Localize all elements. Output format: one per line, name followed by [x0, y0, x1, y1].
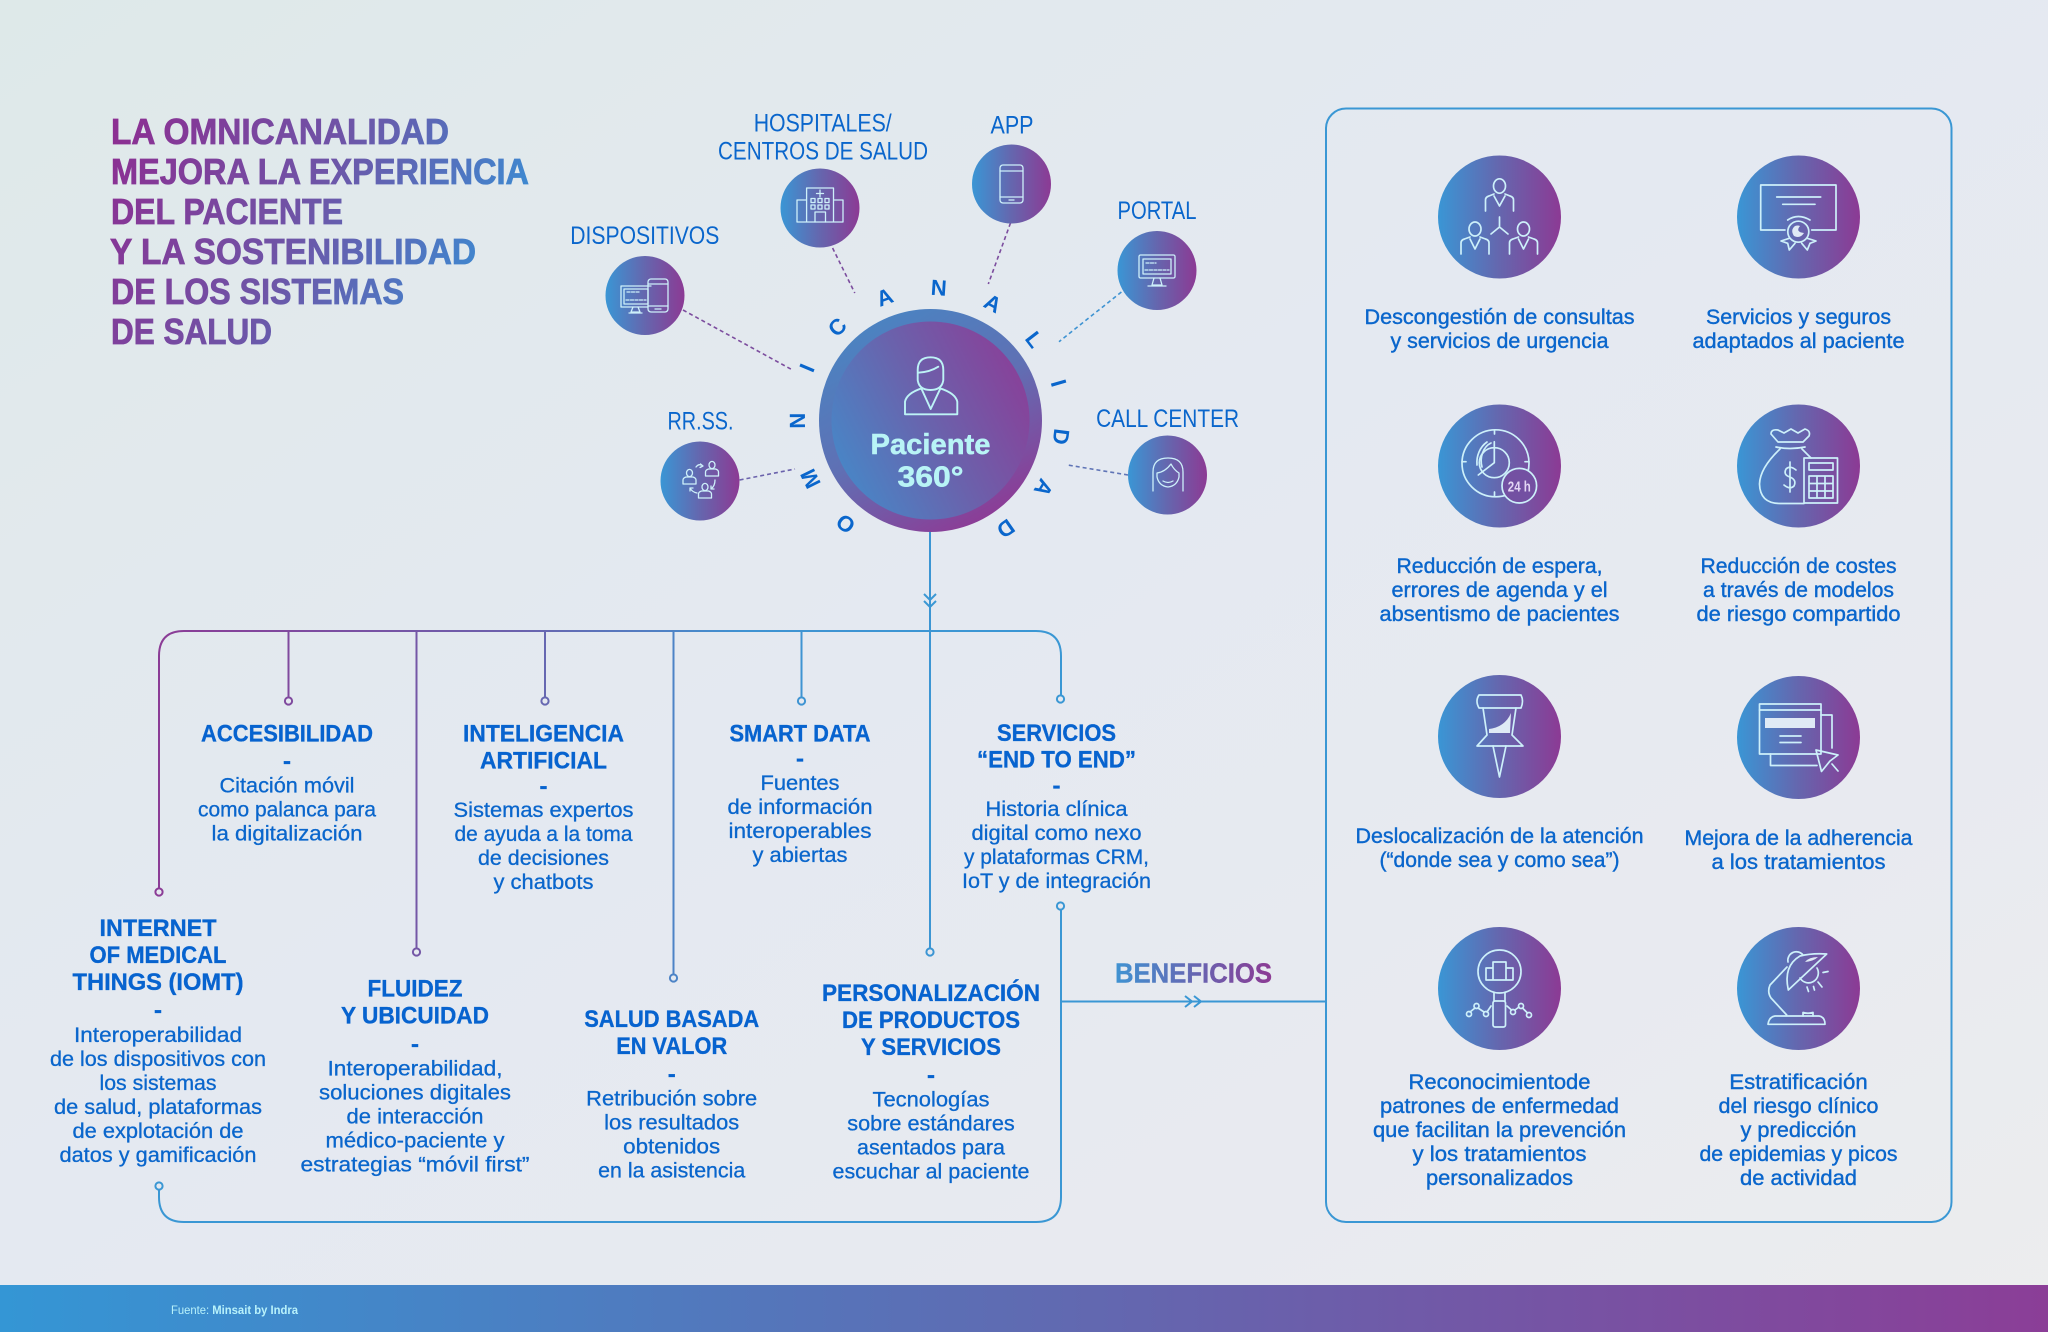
text block: salud basada en valor: SALUD BASADA [584, 1006, 759, 1033]
circular text: OMNICANALIDAD: L [1020, 327, 1048, 353]
text block: salud basada en valor: Retribución sobre [586, 1088, 757, 1111]
icon: certificate [1737, 156, 1860, 278]
channel: portal [1118, 197, 1197, 310]
icon: clock 24 h [1438, 404, 1561, 528]
channel: dispositivos [570, 222, 719, 335]
arrow: down chevrons [924, 594, 936, 607]
source note: Fuente: Minsait by Indra [171, 1305, 299, 1317]
text block: servicios end to end: SERVICIOS [997, 720, 1116, 747]
text: servicios y seguros: Servicios y seguros [1706, 306, 1891, 329]
text: reduccion de espera: absentismo de pacientes [1380, 603, 1620, 626]
title: DEL PACIENTE [111, 191, 343, 232]
text: reconocimiento: personalizados [1426, 1167, 1573, 1190]
text block: internet of medical things [50, 915, 266, 1167]
channel: portal: PORTAL [1118, 197, 1197, 225]
circular text: OMNICANALIDAD: I [1046, 377, 1071, 390]
channel: call center: CALL CENTER [1096, 405, 1239, 433]
text block: inteligencia artificial [454, 720, 634, 894]
circular text: OMNICANALIDAD: D [992, 514, 1019, 543]
circular text: OMNICANALIDAD: M [795, 465, 826, 493]
text block: salud basada en valor: en la asistencia [598, 1160, 746, 1183]
text: reduccion de costes: a través de modelos [1703, 579, 1894, 602]
text: deslocalizacion: Deslocalización de la atención [1356, 825, 1644, 848]
text block: inteligencia artificial: INTELIGENCIA [463, 720, 624, 748]
label: Paciente 360º: Paciente [870, 429, 990, 461]
channel: dispositivos: DISPOSITIVOS [570, 222, 719, 250]
icon: browser windows and cursor [1737, 676, 1860, 799]
label: Paciente 360º [870, 429, 990, 494]
panel: benefits [1326, 108, 1952, 1222]
footer band [0, 1285, 2048, 1332]
text block: internet of medical things: de los dispositivos con [50, 1048, 266, 1071]
text block: servicios end to end: IoT y de integración [962, 870, 1151, 893]
text block: personalizacion: - [927, 1062, 935, 1089]
text: reduccion de espera: Reducción de espera, [1396, 555, 1602, 578]
title [110, 111, 529, 352]
text: descongestion: y servicios de urgencia [1390, 330, 1609, 353]
text block: smart data [728, 720, 872, 867]
text: mejora de la adherencia: a los tratamientos [1712, 851, 1886, 874]
circular text: OMNICANALIDAD: A [873, 283, 897, 312]
circular text: OMNICANALIDAD: O [831, 509, 860, 539]
text: reduccion de espera [1380, 555, 1620, 626]
text block: personalizacion: escuchar al paciente [832, 1160, 1030, 1184]
channel: app: APP [990, 112, 1034, 140]
text: estratificacion: Estratificación [1729, 1071, 1868, 1094]
icon: monitor [1139, 255, 1175, 286]
text block: personalizacion: sobre estándares [847, 1112, 1015, 1136]
icon: people hierarchy [1438, 156, 1561, 278]
icon: patient [905, 357, 957, 414]
text block: smart data: SMART DATA [730, 720, 870, 748]
circular text: OMNICANALIDAD: C [823, 313, 852, 342]
text block: fluidez y ubicuidad: Y UBICUIDAD [341, 1003, 489, 1030]
text block: personalizacion: asentados para [857, 1136, 1005, 1160]
label: Paciente 360º: 360° [898, 462, 964, 494]
text block: internet of medical things: Interoperabilidad [74, 1024, 242, 1047]
text block: inteligencia artificial: - [540, 773, 548, 800]
text block: internet of medical things: THINGS (IOMT) [72, 969, 244, 996]
text block: accesibilidad: ACCESIBILIDAD [201, 720, 373, 748]
text: servicios y seguros: adaptados al paciente [1692, 330, 1904, 353]
text block: inteligencia artificial: y chatbots [494, 871, 594, 894]
central circle: Paciente 360 [819, 309, 1042, 532]
channel: RR.SS. [660, 408, 740, 520]
icon: money bag and calculator [1737, 404, 1860, 528]
text: reduccion de costes [1696, 555, 1900, 626]
text block: smart data: Fuentes [760, 772, 840, 795]
channel: hospitales: HOSPITALES/ [754, 110, 892, 138]
text block: servicios end to end: Historia clínica [986, 798, 1128, 821]
arrow: beneficios connector [1061, 996, 1326, 1007]
text block: fluidez y ubicuidad: - [411, 1031, 419, 1058]
title: DE SALUD [111, 311, 272, 352]
text: reduccion de costes: Reducción de costes [1700, 555, 1896, 578]
icon: magnifier with chart [1438, 927, 1561, 1050]
text block: fluidez y ubicuidad: FLUIDEZ [368, 976, 462, 1003]
title: LA OMNICANALIDAD [111, 111, 449, 152]
text: reduccion de espera: errores de agenda y el [1392, 579, 1608, 602]
icon: desk lamp [1737, 927, 1860, 1050]
text block: inteligencia artificial: de decisiones [478, 847, 609, 870]
text: reconocimiento: que facilitan la prevención [1373, 1119, 1626, 1142]
text block: inteligencia artificial: Sistemas expertos [454, 799, 634, 822]
text block: smart data: interoperables [728, 820, 872, 843]
text: estratificacion [1700, 1071, 1898, 1190]
text block: internet of medical things: - [154, 997, 162, 1024]
text: estratificacion: y predicción [1740, 1119, 1856, 1142]
channel: hospitales: CENTROS DE SALUD [718, 138, 928, 166]
text block: fluidez y ubicuidad: Interoperabilidad, [328, 1058, 502, 1080]
channel: app [972, 112, 1051, 224]
icon: push pin [1438, 675, 1561, 798]
circular text: OMNICANALIDAD: A [1029, 475, 1058, 501]
text: reconocimiento [1373, 1071, 1626, 1190]
text block: salud basada en valor: los resultados [604, 1112, 739, 1135]
text: mejora de la adherencia: Mejora de la adherencia [1684, 827, 1913, 850]
text block: inteligencia artificial: de ayuda a la toma [454, 823, 633, 846]
text: estratificacion: de epidemias y picos [1700, 1143, 1898, 1166]
icon: devices [621, 279, 668, 313]
text block: inteligencia artificial: ARTIFICIAL [480, 748, 607, 774]
text block: internet of medical things: INTERNET [100, 915, 217, 942]
text block: accesibilidad: como palanca para [198, 798, 376, 822]
text block: smart data: - [796, 746, 804, 772]
text block: accesibilidad: la digitalización [212, 822, 362, 846]
text: estratificacion: del riesgo clínico [1718, 1095, 1878, 1118]
circular text: OMNICANALIDAD: N [930, 275, 948, 301]
text block: servicios end to end: digital como nexo [972, 822, 1142, 845]
text block: fluidez y ubicuidad: estrategias “móvil first” [300, 1154, 530, 1176]
text block: personalizacion: PERSONALIZACIÓN [822, 979, 1040, 1007]
text block: personalizacion: Y SERVICIOS [861, 1034, 1001, 1061]
text block: internet of medical things: OF MEDICAL [90, 942, 226, 969]
text block: personalizacion: Tecnologías [872, 1088, 990, 1112]
text block: servicios end to end: y plataformas CRM, [964, 846, 1149, 869]
text block: smart data: y abiertas [752, 844, 848, 867]
heading: beneficios: BENEFICIOS [1115, 957, 1272, 988]
text: reconocimiento: Reconocimientode [1408, 1071, 1590, 1094]
text block: fluidez y ubicuidad [300, 976, 530, 1176]
text: reduccion de costes: de riesgo compartido [1696, 603, 1900, 626]
text block: personalizacion: DE PRODUCTOS [842, 1007, 1020, 1034]
text block: fluidez y ubicuidad: de interacción [346, 1106, 484, 1128]
text: descongestion: Descongestión de consultas [1364, 306, 1634, 329]
text: estratificacion: de actividad [1740, 1167, 1857, 1190]
text block: smart data: de información [728, 796, 872, 819]
icon: social network [683, 461, 718, 498]
circular text: OMNICANALIDAD: D [1048, 427, 1074, 446]
text: descongestion [1364, 306, 1634, 353]
text: deslocalizacion [1356, 825, 1644, 872]
connector tree [155, 532, 1064, 1222]
text block: internet of medical things: de explotación de [72, 1120, 244, 1143]
channel connector lines [683, 223, 1128, 480]
title: Y LA SOSTENIBILIDAD [110, 231, 476, 272]
circular text: OMNICANALIDAD: I [794, 360, 820, 376]
channel: call center [1096, 405, 1239, 514]
circular text: OMNICANALIDAD [785, 275, 1074, 543]
text block: internet of medical things: de salud, plataformas [54, 1096, 262, 1119]
text block: internet of medical things: los sistemas [100, 1072, 216, 1095]
text block: servicios end to end: “END TO END” [977, 747, 1136, 774]
channel: hospitales [718, 110, 928, 248]
title: DE LOS SISTEMAS [111, 271, 404, 312]
text: mejora de la adherencia [1684, 827, 1913, 874]
text: servicios y seguros [1692, 306, 1904, 353]
icon: agent [1153, 458, 1183, 491]
text block: fluidez y ubicuidad: médico-paciente y [326, 1130, 505, 1152]
icon: hospital [797, 188, 843, 222]
circular text: OMNICANALIDAD: N [785, 413, 810, 429]
text: deslocalizacion: (“donde sea y como sea”) [1380, 849, 1620, 872]
text block: salud basada en valor: EN VALOR [616, 1033, 727, 1060]
text block: accesibilidad: - [283, 748, 291, 775]
icon: clock 24 h: 24 h [1508, 479, 1531, 496]
text block: servicios end to end: - [1052, 772, 1060, 800]
text block: accesibilidad: Citación móvil [220, 774, 354, 798]
title: MEJORA LA EXPERIENCIA [111, 151, 529, 192]
text block: accesibilidad [198, 720, 376, 846]
text block: salud basada en valor: - [668, 1061, 676, 1088]
text block: servicios end to end [962, 720, 1151, 893]
channel: RR.SS.: RR.SS. [668, 408, 734, 436]
text block: fluidez y ubicuidad: soluciones digitales [319, 1082, 511, 1104]
text block: salud basada en valor [584, 1006, 759, 1183]
icon: smartphone [1000, 165, 1023, 203]
circular text: OMNICANALIDAD: A [980, 289, 1006, 318]
text: reconocimiento: y los tratamientos [1412, 1143, 1586, 1166]
text block: personalizacion [822, 979, 1040, 1184]
text block: internet of medical things: datos y gamificación [60, 1144, 256, 1167]
text block: salud basada en valor: obtenidos [623, 1136, 720, 1159]
text: reconocimiento: patrones de enfermedad [1380, 1095, 1619, 1118]
